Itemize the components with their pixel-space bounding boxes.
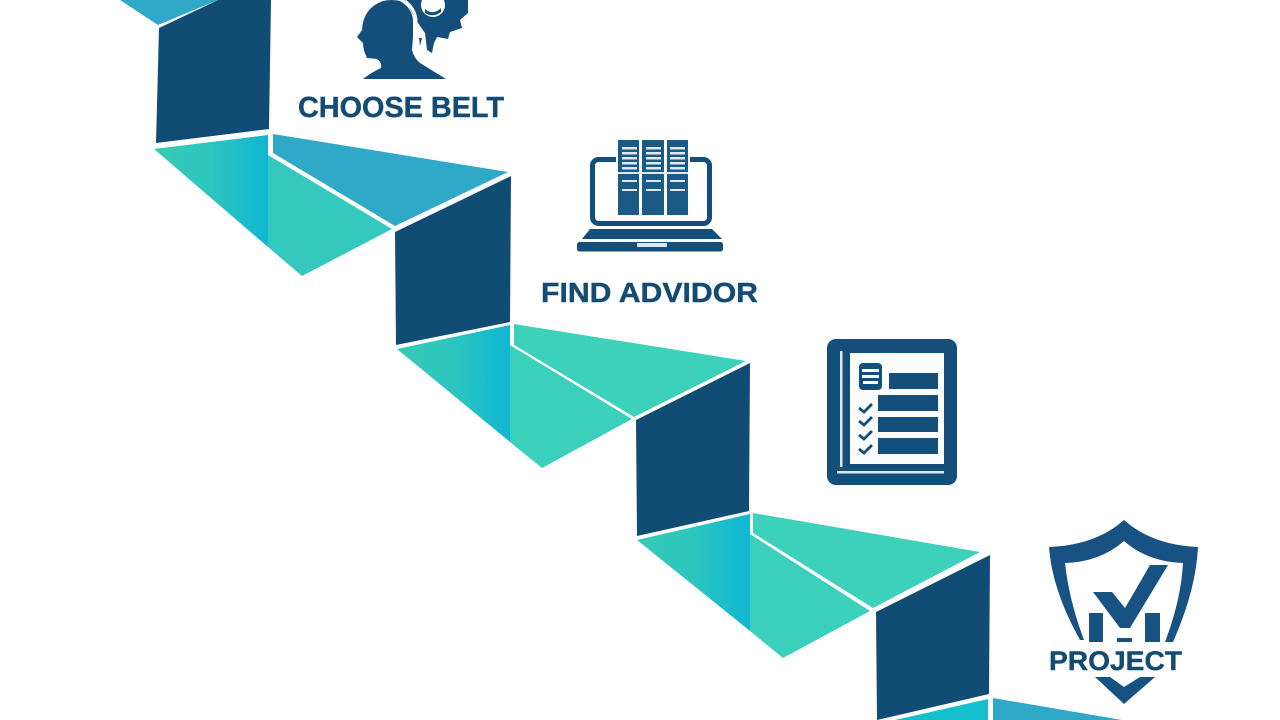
label: find advidor: FIND ADVIDOR <box>541 277 758 308</box>
icon: laptop with server racks <box>577 138 723 252</box>
staircase step 1 <box>154 0 508 276</box>
label: choose belt: CHOOSE BELT <box>298 92 504 124</box>
staircase step 3 <box>636 363 980 658</box>
staircase step 4 <box>876 555 1122 720</box>
icon: document checklist <box>827 339 957 485</box>
staircase step 2 <box>395 176 746 468</box>
icon: head with gear <box>357 0 468 79</box>
staircase step 0: top-left fragment <box>120 0 218 25</box>
label: project: PROJECT <box>1049 646 1183 676</box>
icon: shield with check <box>1049 520 1198 704</box>
